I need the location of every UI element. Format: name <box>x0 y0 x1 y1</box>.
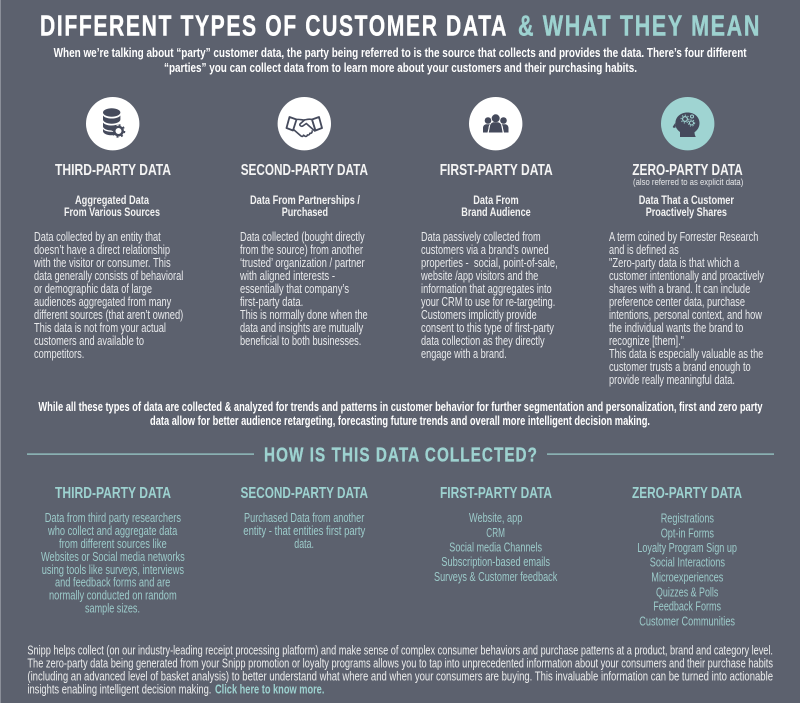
body text: engage with a brand. <box>421 347 507 361</box>
collection list: Opt-in Forms <box>661 526 714 540</box>
collection text: who collect and aggregate data <box>47 524 177 538</box>
subheading: Brand Audience <box>461 205 531 219</box>
body text: your CRM to use for re-targeting. <box>421 295 555 309</box>
collection list: Subscription-based emails <box>441 555 550 569</box>
collection list: Social media Channels <box>449 540 542 554</box>
body text: first-party data. <box>240 295 303 309</box>
panel: third-party data <box>33 97 183 361</box>
intro text <box>54 46 747 75</box>
subheading <box>639 193 734 219</box>
body text: competitors. <box>34 347 84 361</box>
body text: data generally consists of behavioral <box>34 269 183 283</box>
body text: This data is not from your actual <box>34 321 166 335</box>
body text: with aligned interests - <box>239 269 335 283</box>
body text: or demographic data of large <box>34 282 152 296</box>
body text: customers via a brand’s owned <box>421 243 549 257</box>
body text: consent to this type of first-party <box>421 321 555 335</box>
body text <box>609 230 765 387</box>
body text: beneficial to both businesses. <box>240 334 361 348</box>
body text: information that aggregates into <box>421 282 552 296</box>
collection list: CRM <box>486 526 505 540</box>
collection text <box>243 511 366 551</box>
body text: customers and available to <box>34 334 144 348</box>
note: explicit data: (also referred to as explicit data) <box>633 177 743 188</box>
subheading: From Various Sources <box>64 205 160 219</box>
footer text: insights enabling intelligent decision making. <box>27 682 211 696</box>
collection list <box>434 511 558 584</box>
heading: SECOND-PARTY DATA <box>241 162 368 179</box>
collection text: normally conducted on random <box>49 588 177 602</box>
title: DIFFERENT TYPES OF CUSTOMER DATA <box>40 10 508 42</box>
body text: ‘trusted’ organization / partner <box>240 256 365 270</box>
heading: FIRST-PARTY DATA <box>440 485 552 502</box>
body text <box>33 230 183 361</box>
body text: properties - social, point-of-sale, <box>421 256 558 270</box>
collection list: Surveys & Customer feedback <box>434 570 558 584</box>
collection list: Customer Communities <box>639 614 735 628</box>
icon: handshake <box>278 97 331 150</box>
panel: first-party data <box>420 97 558 361</box>
collection text: data. <box>294 537 314 551</box>
subheading <box>461 193 531 219</box>
body text: data and insights are mutually <box>240 321 364 335</box>
body text: recognize [them]." <box>609 334 684 348</box>
heading: THIRD-PARTY DATA <box>55 162 171 179</box>
body text: website /app visitors and the <box>420 269 538 283</box>
collection text: Data from third party researchers <box>45 511 181 525</box>
heading: FIRST-PARTY DATA <box>440 162 553 179</box>
intro text: “parties” you can collect data from to learn more about your customers and their purchasing habits. <box>164 61 637 75</box>
body text: preference center data, purchase <box>609 295 745 309</box>
column: third-party collection <box>41 485 185 616</box>
subheading: Purchased <box>282 205 328 219</box>
collection list: Quizzes & Polls <box>656 586 718 600</box>
icon: head with gears <box>661 97 714 150</box>
subheading <box>64 193 160 219</box>
collection text: from different sources like <box>59 537 167 551</box>
subheading: Proactively Shares <box>646 205 727 219</box>
body text: shares with a brand. It can include <box>609 282 750 296</box>
section heading: HOW IS THIS DATA COLLECTED? <box>264 444 538 466</box>
body text: Data collected (bought directly <box>240 230 365 244</box>
heading: ZERO-PARTY DATA <box>632 485 742 502</box>
icon: people group <box>469 97 522 150</box>
collection text: sample sizes. <box>85 602 140 616</box>
body text: doesn’t have a direct relationship <box>34 243 170 257</box>
collection list: Feedback Forms <box>653 600 721 614</box>
subheading: Data That a Customer <box>639 193 734 207</box>
body text: essentially that company’s <box>240 282 349 296</box>
body text: with the visitor or consumer. This <box>33 256 171 270</box>
footer text: Click here to know more. <box>215 682 324 696</box>
collection text: using tools like surveys, interviews <box>42 563 184 577</box>
body text <box>239 230 368 348</box>
body text: audiences aggregated from many <box>34 295 172 309</box>
subheading: Aggregated Data <box>75 193 149 207</box>
heading: ZERO-PARTY DATA <box>632 162 743 179</box>
body text: and is defined as <box>609 243 679 257</box>
heading: SECOND-PARTY DATA <box>240 485 368 502</box>
collection text <box>41 511 185 616</box>
collection text: and feedback forms and are <box>55 576 170 590</box>
summary text <box>38 400 763 428</box>
subheading: Data From <box>473 193 519 207</box>
body text: customer trusts a brand enough to <box>609 360 751 374</box>
heading: THIRD-PARTY DATA <box>55 485 171 502</box>
collection text: Websites or Social media networks <box>41 550 185 564</box>
panel: second-party data <box>239 97 368 348</box>
body text: different sources (that aren’t owned) <box>34 308 183 322</box>
collection list: Loyalty Program Sign up <box>637 541 737 555</box>
collection text: entity - that entities first party <box>243 524 366 538</box>
icon: database with gear <box>86 97 139 150</box>
footer text <box>27 644 773 696</box>
body text: Data collected by an entity that <box>34 230 161 244</box>
body text: data collection as they directly <box>421 334 545 348</box>
collection list <box>637 512 737 628</box>
collection list: Registrations <box>661 512 714 526</box>
body text: "Zero-party data is that which a <box>609 256 739 270</box>
column: second-party collection <box>240 485 368 551</box>
body text <box>420 230 558 361</box>
subheading: Data From Partnerships / <box>250 193 361 207</box>
body text: This is normally done when the <box>240 308 368 322</box>
panel: zero-party data <box>609 97 765 387</box>
collection list: Microexperiences <box>651 570 723 584</box>
column: zero-party collection <box>632 485 742 628</box>
collection list: Website, app <box>469 511 522 525</box>
body text: from the source) from another <box>240 243 363 257</box>
collection text: Purchased Data from another <box>244 511 364 525</box>
subheading <box>250 193 361 219</box>
body text: Data passively collected from <box>421 230 541 244</box>
body text: provide really meaningful data. <box>609 373 735 387</box>
collection list: Social Interactions <box>650 556 725 570</box>
column: first-party collection <box>434 485 558 584</box>
body text: the individual wants the brand to <box>609 321 743 335</box>
body text: Customers implicitly provide <box>421 308 537 322</box>
